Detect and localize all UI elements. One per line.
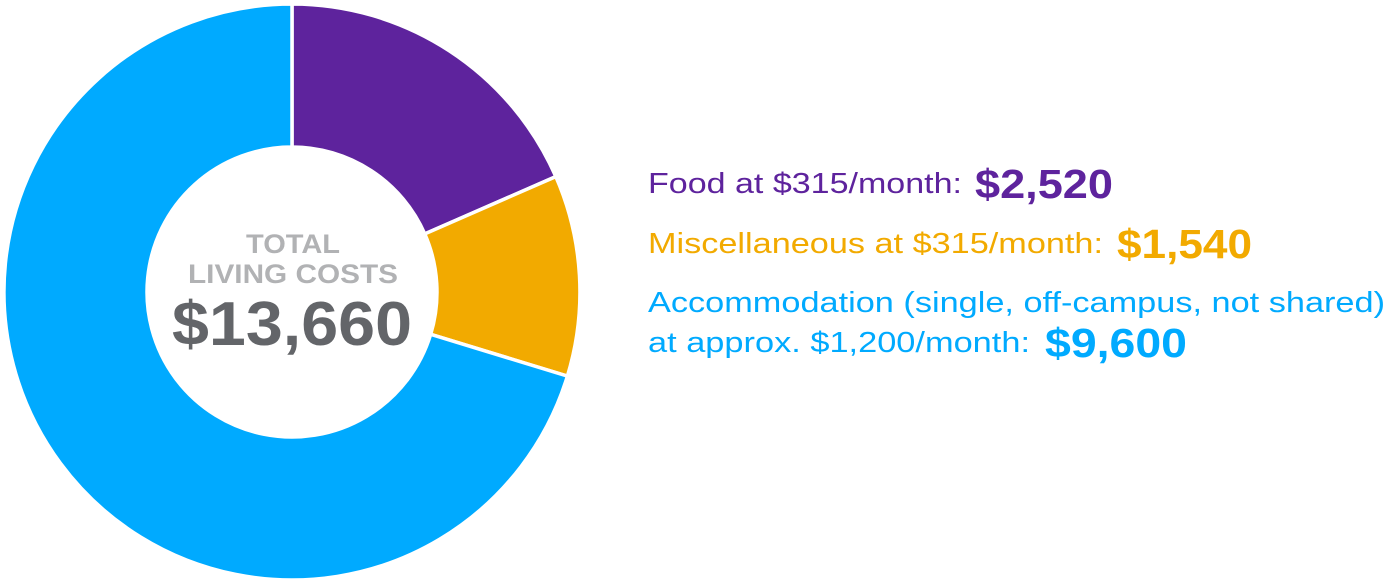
donut chart xyxy=(4,4,580,580)
segment: miscellaneous xyxy=(425,177,580,376)
legend: accommodation: $9,600 xyxy=(1045,320,1187,366)
legend: miscellaneous: Miscellaneous at $315/month: xyxy=(648,228,1103,260)
center total label: TOTAL xyxy=(246,229,340,259)
center total label xyxy=(172,229,412,359)
legend: miscellaneous: $1,540 xyxy=(1117,221,1252,267)
legend: accommodation: Accommodation (single, off-campus, not shared) xyxy=(648,287,1385,319)
legend: food: $2,520 xyxy=(975,161,1113,207)
segment: accommodation xyxy=(4,4,567,580)
legend: accommodation xyxy=(648,287,1385,366)
legend: food: Food at $315/month: xyxy=(648,168,962,200)
center total label: $13,660 xyxy=(172,290,412,359)
legend: food xyxy=(648,161,1113,207)
center total label: LIVING COSTS xyxy=(188,259,398,289)
legend: accommodation: at approx. $1,200/month: xyxy=(648,327,1030,359)
segment: food xyxy=(292,4,556,234)
legend: miscellaneous xyxy=(648,221,1252,267)
